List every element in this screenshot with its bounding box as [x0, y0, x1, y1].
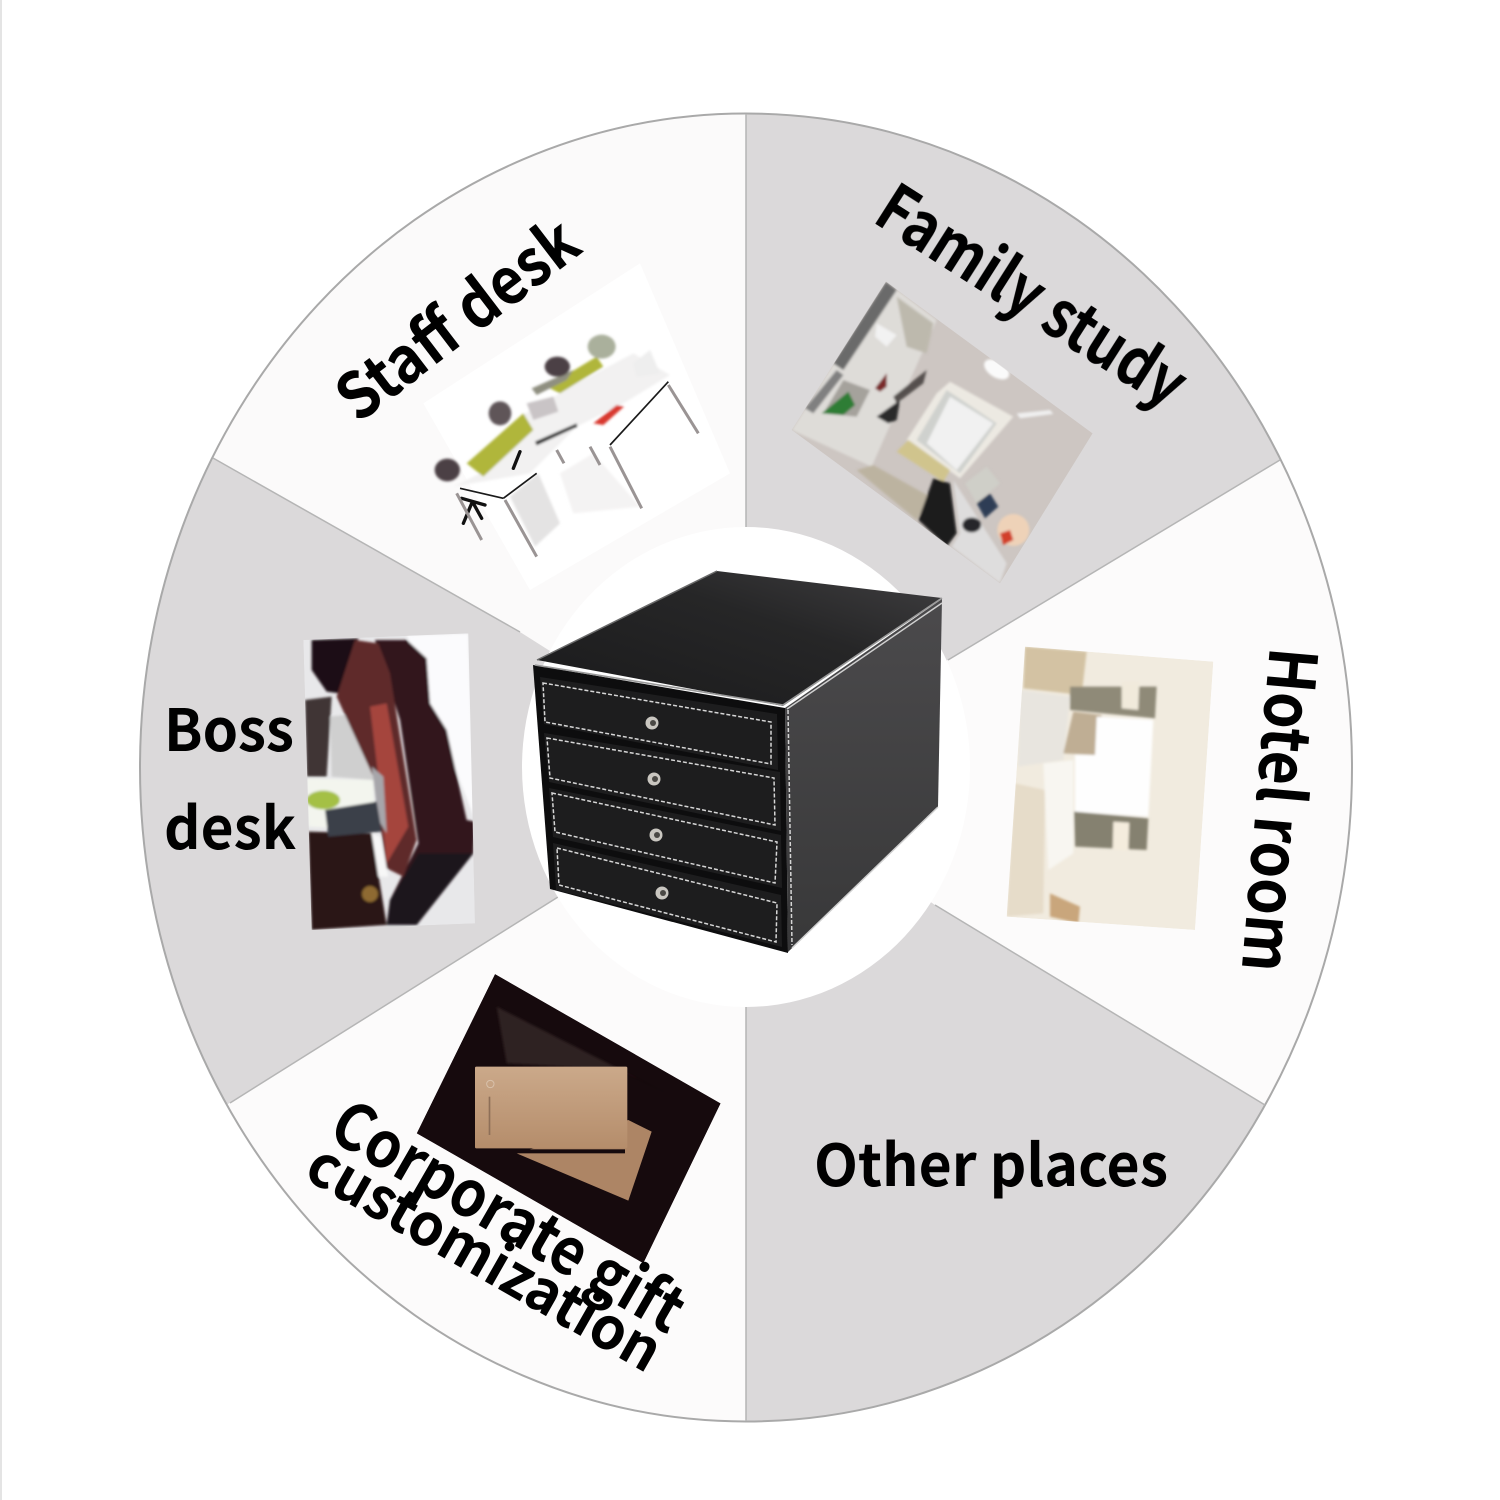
photo: staff desk	[423, 263, 730, 590]
label: customization: customization	[294, 1119, 680, 1388]
label: boss: Boss	[164, 684, 294, 768]
drawer 3	[549, 788, 782, 888]
wheel of usage sectors	[141, 114, 1280, 1420]
label: staff desk: Staff desk	[314, 193, 596, 439]
sector: other places	[746, 902, 1264, 1420]
cabinet top face	[537, 571, 942, 706]
label: corporate gift: Corporate gift	[316, 1074, 705, 1351]
sector divider lines	[213, 114, 1280, 1421]
photo: boss desk	[303, 633, 475, 930]
cabinet side face	[785, 599, 942, 952]
label: other places: Other places	[814, 1119, 1168, 1203]
sector: hotel room	[746, 328, 1500, 1247]
sector: staff desk	[0, 0, 746, 775]
sector: boss desk	[141, 459, 558, 1104]
drawer 4	[553, 843, 782, 947]
cabinet front face	[533, 665, 788, 953]
label: hotel room: Hotel room	[1222, 644, 1346, 976]
center white circle	[522, 527, 970, 1007]
label: family study: Family study	[860, 157, 1209, 427]
label: desk: desk	[164, 782, 296, 866]
sector: corporate gift	[0, 775, 746, 1500]
photo: corporate gift	[417, 974, 721, 1263]
wheel outline	[140, 114, 1352, 1422]
drawer 2	[544, 733, 781, 831]
sector: family study	[746, 114, 1280, 660]
photo: hotel room	[1007, 647, 1213, 930]
cabinet product	[533, 571, 942, 953]
photo: family study	[792, 282, 1093, 583]
drawer 1	[540, 677, 778, 770]
